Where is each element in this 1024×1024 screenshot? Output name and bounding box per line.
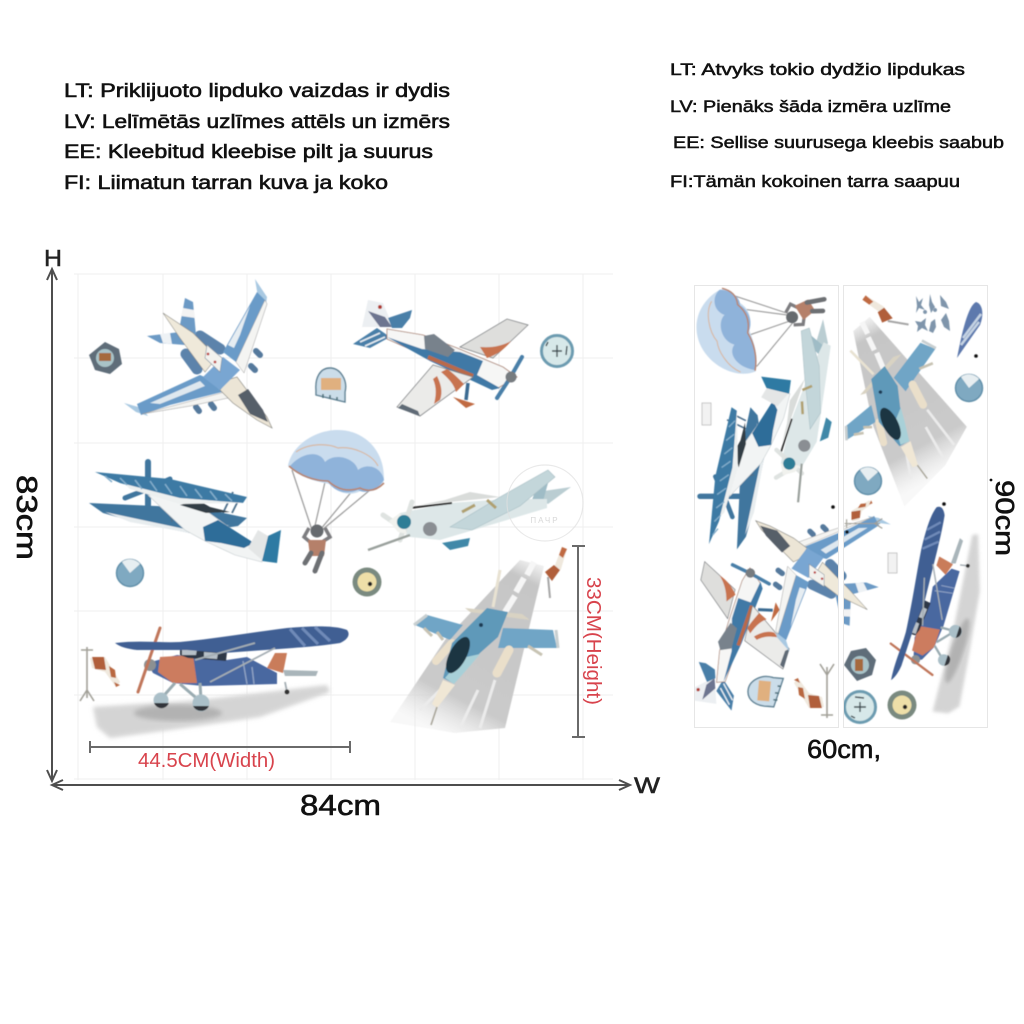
icon: white jet right half — [844, 516, 890, 626]
icon: hexagon badge — [89, 342, 122, 374]
icon: windsock on runway — [862, 295, 910, 326]
label: 84cm: 84cm — [300, 790, 381, 822]
icon: blue wing patch — [957, 302, 982, 358]
axis: width arrow — [52, 780, 630, 790]
panel: right sheet 2 — [843, 285, 988, 728]
dimension line: height — [572, 546, 585, 737]
icon: stunt plane rotated — [695, 560, 790, 711]
registration dots — [845, 354, 978, 534]
watermark stamp — [507, 465, 583, 541]
icon: windsock rotated — [794, 664, 834, 718]
dimension text: height: 33CM(Height) — [582, 577, 604, 705]
watermark stamp: ПАЧР — [530, 516, 560, 525]
axis letter H: H — [44, 245, 62, 271]
icon: fighter on runway rotated — [844, 318, 967, 494]
icon: pie badge lower — [854, 467, 882, 494]
icon: yellow gauge — [888, 690, 916, 720]
icon: fighter jet on runway — [390, 560, 558, 733]
icon: pie badge — [116, 559, 144, 586]
icon: dial badge rotated — [747, 675, 783, 708]
text block: right captions: EE: Sellise suurusega kleebis saabub — [673, 133, 1004, 152]
icon: round compass badge — [844, 692, 876, 722]
label tag — [702, 403, 711, 425]
panel: left sticker sheet artwork — [80, 279, 572, 738]
axis letter W: W — [634, 773, 660, 798]
icon: blue high-wing plane with shadow — [93, 626, 349, 738]
text block: right captions: LV: Pienāks šāda izmēra uzlīme — [670, 97, 951, 116]
text block: left captions: LV: Lelīmētās uzlīmes attēls un izmērs — [64, 112, 450, 133]
icon: windsock left — [80, 647, 120, 701]
icon: high-wing plane rotated — [889, 506, 981, 714]
text block: right captions: FI:Tämän kokoinen tarra saapuu — [670, 172, 960, 191]
text block: left captions: EE: Kleebitud kleebise pilt ja suurus — [64, 142, 433, 163]
dimension text: width: 44.5CM(Width) — [138, 750, 275, 772]
text block: left captions: LT: Priklijuoto lipduko vaizdas ir dydis — [64, 81, 450, 102]
axis: height arrow — [47, 269, 57, 781]
grid background of the left sticker sheet — [74, 274, 613, 780]
icon: round compass badge — [542, 336, 572, 366]
label: 60cm: 60cm, — [807, 734, 881, 764]
icon: white jet left half — [754, 520, 838, 651]
icon: stunt plane — [353, 300, 528, 416]
icon: windsock right — [545, 547, 567, 598]
panel: right sheet 1 — [694, 285, 839, 728]
icon: pale propeller plane rotated — [774, 320, 832, 503]
icon: small windsock bottom of runway — [844, 500, 882, 528]
label: 83cm: 83cm — [10, 475, 42, 560]
icon: hexagon badge — [844, 648, 876, 681]
icon: tiny plane cluster — [915, 294, 950, 333]
icon: blue biplane — [89, 462, 281, 563]
text block: left captions — [64, 81, 450, 194]
icon: dial badge — [316, 368, 346, 402]
icon: biplane rotated — [700, 377, 791, 549]
label: 90cm: 90cm — [990, 480, 1020, 556]
icon: white jet fighter — [124, 279, 272, 428]
text block: right captions: LT: Atvyks tokio dydžio lipdukas — [670, 60, 965, 79]
registration dot — [831, 505, 835, 509]
registration dot outside sheet — [990, 479, 992, 481]
dimension line: width — [90, 741, 350, 753]
icon: parachutist — [288, 430, 384, 571]
text block: right captions — [670, 60, 1004, 191]
icon: pale propeller plane — [368, 470, 571, 550]
icon: parachutist rotated — [696, 287, 828, 374]
text block: left captions: FI: Liimatun tarran kuva ja koko — [64, 173, 388, 194]
icon: pie badge upper — [956, 374, 982, 402]
label tag — [888, 553, 897, 573]
icon: yellow gauge — [352, 568, 382, 596]
